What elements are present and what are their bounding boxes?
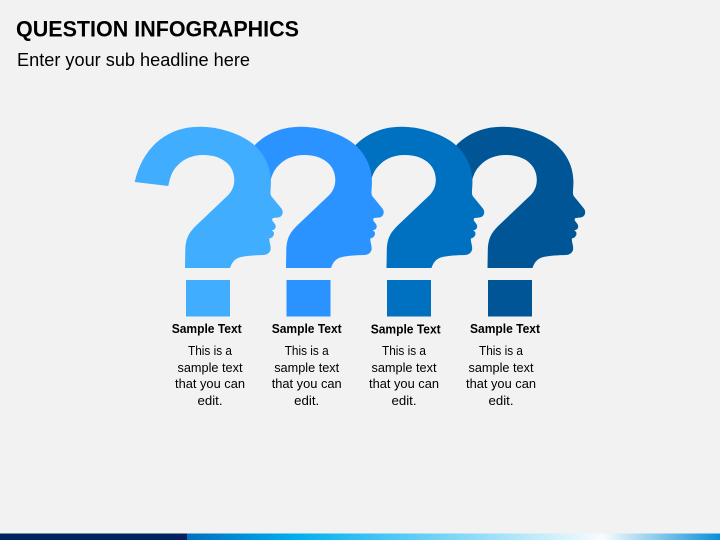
footer bar [0,534,720,540]
text block 3: edit. [392,393,416,408]
text block 2: Sample Text [272,322,342,336]
text block 2: that you can [272,376,342,391]
text block 1: that you can [175,376,245,391]
text block 4: sample text [468,360,534,375]
text block 2: sample text [274,360,340,375]
text block 2: edit. [294,393,319,408]
text block 3: This is a [382,343,427,358]
text block 1: sample text [178,360,243,375]
text block 4: that you can [466,376,536,391]
text block 4: edit. [488,393,514,408]
text block 4: Sample Text [470,322,541,336]
question head 4: dark navy blue [437,127,585,316]
title: QUESTION INFOGRAPHICS [16,16,299,42]
text block 1 [172,322,245,408]
text block 2: This is a [285,343,329,358]
text block 3 [369,322,441,408]
text block 4: This is a [479,343,524,358]
text block 1: Sample Text [172,322,242,336]
text block 3: Sample Text [371,322,441,336]
text block 2 [272,322,342,408]
text block 1: edit. [198,393,222,408]
text block 3: that you can [369,376,439,391]
question head 1: light blue [135,127,283,316]
text block 4 [466,322,541,408]
question head 2: bright blue [236,127,384,316]
sub headline: Enter your sub headline here [17,49,250,70]
text block 1: This is a [188,343,233,358]
question head 3: mid blue [336,127,484,316]
text block 3: sample text [372,360,437,375]
